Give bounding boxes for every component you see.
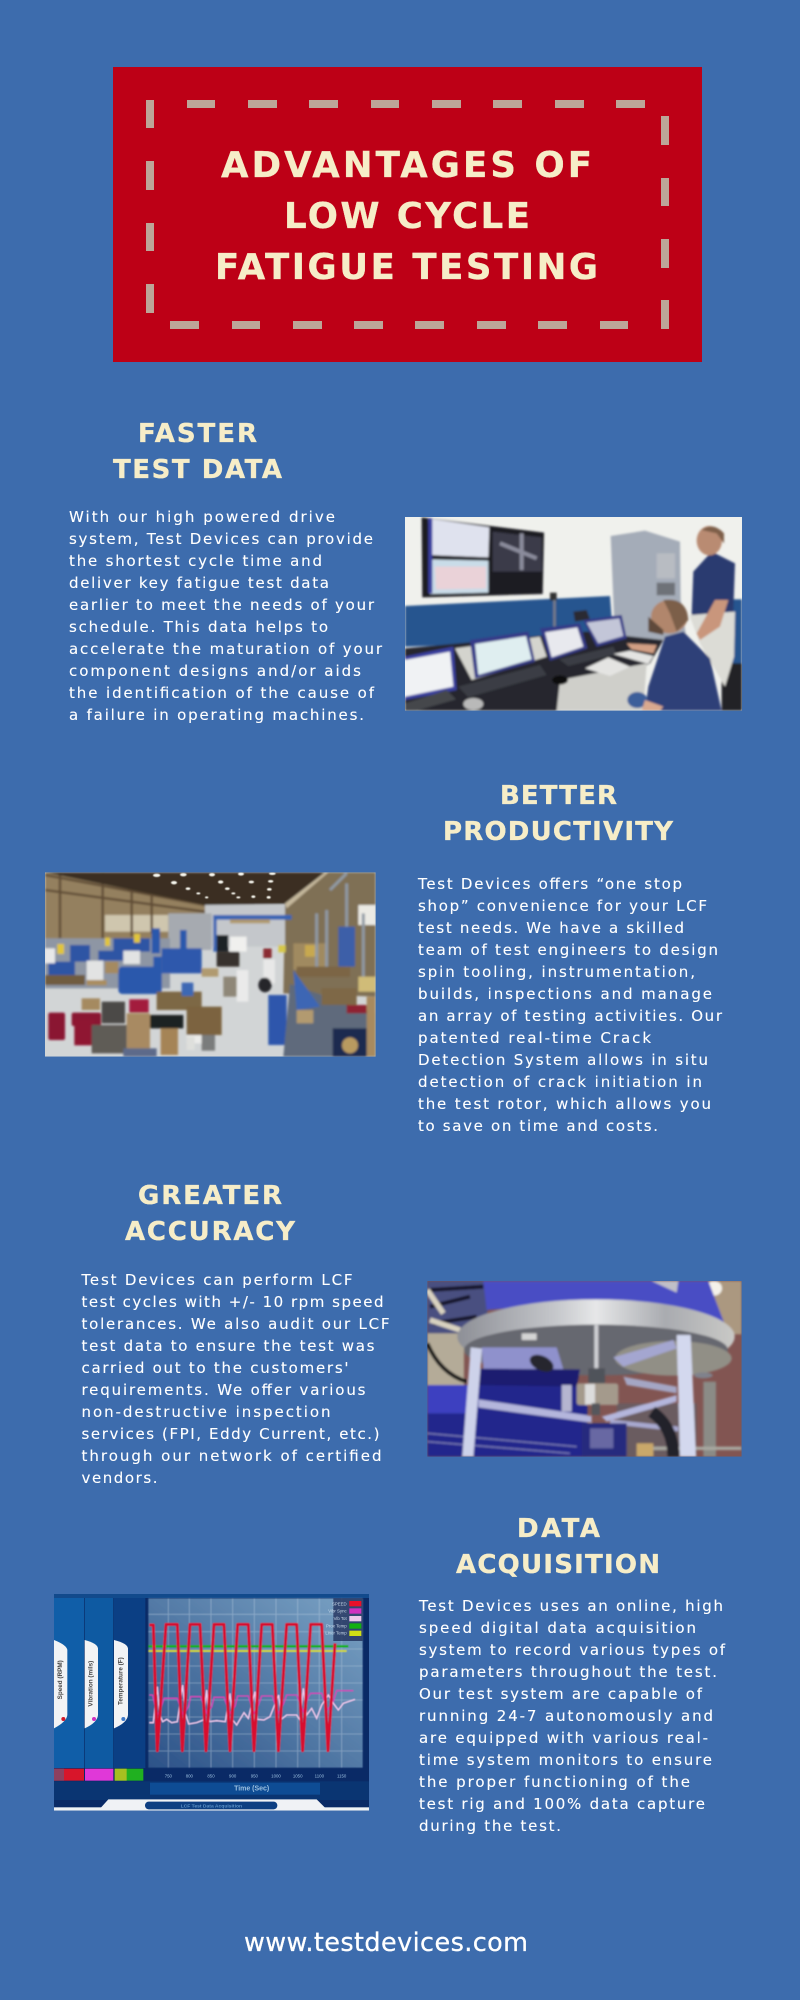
text block: better productivity: the test rotor, which allows you xyxy=(418,1095,711,1113)
gauge tabs: Vibration (mils) xyxy=(88,1661,95,1707)
text block: faster test data: deliver key fatigue test data xyxy=(69,574,329,592)
heading: data acquisition xyxy=(456,1514,660,1580)
axis labels: 850 xyxy=(207,1774,215,1779)
website url: www.testdevices.com xyxy=(244,1928,528,1958)
axis labels: 1100 xyxy=(315,1774,325,1779)
text block: greater accuracy: test cycles with +/- 10 rpm speed xyxy=(82,1293,384,1311)
text block: better productivity: to save on time and costs. xyxy=(418,1117,658,1135)
text block: greater accuracy: through our network of certified xyxy=(82,1447,382,1465)
title text: FATIGUE TESTING xyxy=(215,247,598,288)
heading: better productivity: PRODUCTIVITY xyxy=(443,817,674,847)
text block: greater accuracy: non-destructive inspection xyxy=(82,1403,330,1421)
plot area xyxy=(148,1598,363,1768)
axis labels: 1050 xyxy=(293,1774,303,1779)
text block: better productivity: spin tooling, instrumentation, xyxy=(418,963,695,981)
chart legend xyxy=(325,1598,363,1641)
bottom tab xyxy=(54,1799,369,1811)
colour bars xyxy=(54,1769,143,1781)
text block: faster test data: the shortest cycle time and xyxy=(69,552,322,570)
text block: better productivity: test needs. We have a skilled xyxy=(418,919,684,937)
title banner xyxy=(113,67,702,362)
chart legend: Vibr Sync xyxy=(328,1609,347,1614)
text block: faster test data: component designs and/or aids xyxy=(69,662,361,680)
axis labels xyxy=(165,1774,347,1793)
heading: faster test data xyxy=(113,419,282,485)
text block: data acquisition: parameters throughout the test. xyxy=(419,1663,717,1681)
gauge tabs: Speed (RPM) xyxy=(57,1660,64,1699)
text block: data acquisition: running 24-7 autonomously and xyxy=(419,1707,713,1725)
text block: better productivity: Detection System allows in situ xyxy=(418,1051,708,1069)
text block: data acquisition: time system monitors to ensure xyxy=(419,1751,712,1769)
heading: data acquisition: DATA xyxy=(517,1514,600,1544)
text block: greater accuracy: services (FPI, Eddy Current, etc.) xyxy=(82,1425,380,1443)
photo: spin rig disc xyxy=(427,1281,742,1457)
text block: better productivity xyxy=(417,875,723,1135)
axis labels: 750 xyxy=(165,1774,173,1779)
text block: faster test data: system, Test Devices can provide xyxy=(69,530,373,548)
photo: test facility floor xyxy=(45,872,376,1057)
text block: faster test data: earlier to meet the needs of your xyxy=(69,596,375,614)
axis labels: 1150 xyxy=(337,1774,347,1779)
chart legend: Prox Temp xyxy=(326,1623,347,1628)
text block: faster test data: the identification of the cause of xyxy=(69,684,375,702)
chart: data acquisition software screen xyxy=(54,1594,369,1811)
title text: ADVANTAGES OF xyxy=(221,145,592,186)
heading: better productivity: BETTER xyxy=(500,781,617,811)
gauge tabs xyxy=(54,1640,128,1728)
text block: data acquisition: Our test system are capable of xyxy=(419,1685,703,1703)
title text: LOW CYCLE xyxy=(284,196,530,237)
bottom tab: LCF Test Data Acquisition xyxy=(181,1803,242,1809)
text block: data acquisition: system to record various types of xyxy=(419,1641,726,1659)
text block: faster test data: accelerate the maturation of your xyxy=(69,640,383,658)
text block: greater accuracy: vendors. xyxy=(82,1469,158,1487)
text block: better productivity: team of test engineers to design xyxy=(418,941,718,959)
text block: better productivity: Test Devices offers “one stop xyxy=(417,875,682,893)
chart legend: SPEED xyxy=(332,1601,347,1606)
title text xyxy=(215,145,598,288)
text block: greater accuracy xyxy=(80,1271,390,1487)
text block: better productivity: shop” convenience for your LCF xyxy=(418,897,707,915)
heading: greater accuracy xyxy=(125,1181,296,1247)
axis labels: 900 xyxy=(229,1774,237,1779)
text block: data acquisition: the proper functioning of the xyxy=(419,1773,690,1791)
text block: data acquisition xyxy=(418,1597,726,1835)
text block: better productivity: an array of testing activities. Our xyxy=(418,1007,723,1025)
text block: data acquisition: during the test. xyxy=(419,1817,561,1835)
text block: greater accuracy: carried out to the customers' xyxy=(82,1359,348,1377)
heading: data acquisition: ACQUISITION xyxy=(456,1550,660,1580)
heading: greater accuracy: GREATER xyxy=(138,1181,282,1211)
text block: faster test data xyxy=(69,508,383,724)
text block: data acquisition: speed digital data acquisition xyxy=(419,1619,696,1637)
axis labels: 1000 xyxy=(271,1774,281,1779)
photo: control room with engineers xyxy=(405,517,742,711)
chart legend: Vib Tot xyxy=(334,1616,347,1621)
text block: faster test data: schedule. This data helps to xyxy=(69,618,328,636)
text block: greater accuracy: tolerances. We also audit our LCF xyxy=(82,1315,390,1333)
chart legend: Liner Temp xyxy=(325,1631,347,1636)
axis labels: 950 xyxy=(251,1774,259,1779)
text block: better productivity: patented real-time Crack xyxy=(418,1029,651,1047)
text block: data acquisition: Test Devices uses an online, high xyxy=(418,1597,723,1615)
axis labels: Time (Sec) xyxy=(234,1786,269,1793)
text block: better productivity: detection of crack initiation in xyxy=(418,1073,702,1091)
gauge tabs: Temperature (F) xyxy=(118,1657,125,1705)
text block: data acquisition: are equipped with various real- xyxy=(419,1729,708,1747)
axis labels: 800 xyxy=(186,1774,194,1779)
text block: faster test data: With our high powered drive xyxy=(69,508,335,526)
text block: faster test data: a failure in operating machines. xyxy=(69,706,364,724)
text block: greater accuracy: Test Devices can perform LCF xyxy=(80,1271,352,1289)
text block: better productivity: builds, inspections and manage xyxy=(418,985,712,1003)
text block: greater accuracy: test data to ensure the test was xyxy=(82,1337,375,1355)
heading: faster test data: FASTER xyxy=(138,419,257,449)
text block: data acquisition: test rig and 100% data capture xyxy=(419,1795,705,1813)
heading: better productivity xyxy=(443,781,674,847)
text block: greater accuracy: requirements. We offer various xyxy=(82,1381,366,1399)
heading: faster test data: TEST DATA xyxy=(113,455,282,485)
heading: greater accuracy: ACCURACY xyxy=(125,1217,296,1247)
